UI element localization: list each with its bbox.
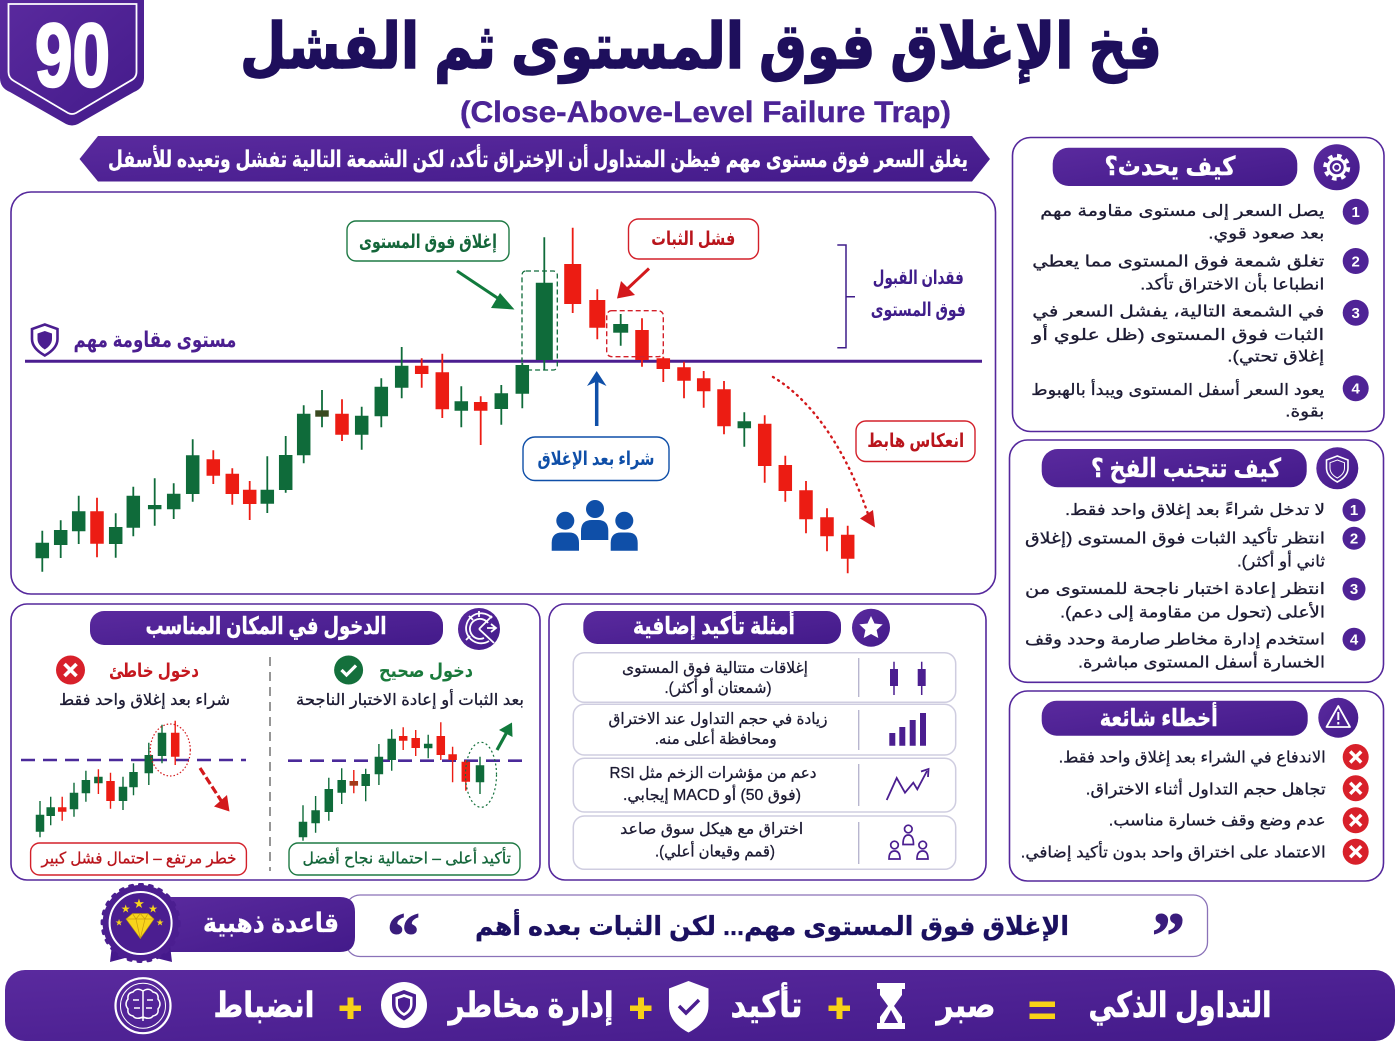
callout: bearish reversal: انعكاس هابط <box>867 431 964 452</box>
step numbers: 3 <box>1350 581 1358 598</box>
candlesticks <box>42 228 848 573</box>
row: momentum indicators <box>573 758 956 812</box>
icon: volume bars <box>889 713 926 746</box>
step numbers <box>1342 498 1366 651</box>
text: mistakes <box>1021 749 1326 863</box>
text: correct entry description: بعد الثبات أو إعادة الاختبار الناجحة <box>296 689 524 710</box>
golden rule label: قاعدة ذهبية <box>203 908 339 938</box>
label: wrong entry: دخول خاطئ <box>109 661 199 682</box>
icon: brain <box>116 978 170 1033</box>
icon: diamond seal: ★ <box>115 918 123 928</box>
icon: diamond seal: ★ <box>133 897 145 912</box>
arrow: green to breakout candle <box>457 271 514 310</box>
divider <box>269 657 271 871</box>
mini chart: early buy <box>21 721 246 837</box>
callout: buy after close: شراء بعد الإغلاق <box>538 449 654 470</box>
plus <box>630 998 652 1019</box>
icon: structure nodes <box>889 825 928 859</box>
text: avoidance steps: ثاني أو أكثر). <box>1237 551 1325 572</box>
row: consecutive closes <box>573 653 956 702</box>
row: consecutive closes: (شمعتان أو أكثر). <box>664 677 772 698</box>
formula: discipline: انضباط <box>214 986 314 1025</box>
text: steps: في الشمعة التالية، يفشل السعر في <box>1032 304 1324 322</box>
icon: two candles <box>890 662 925 695</box>
icon: target <box>458 608 500 650</box>
text: avoidance steps: الخسارة أسفل المستوى مباشرة. <box>1078 652 1325 673</box>
icon: diamond seal <box>102 884 179 962</box>
text: steps: انطباعا بأن الاختراق تأكد. <box>1140 272 1324 294</box>
step numbers: 2 <box>1350 530 1358 547</box>
icon: diamond seal: ★ <box>121 902 131 916</box>
text: steps: تغلق شمعة فوق المستوى مما يعطي <box>1032 254 1324 272</box>
icon: shield in circle <box>381 982 427 1028</box>
callout: close above level <box>347 221 509 261</box>
icon: crowd of traders <box>552 500 638 551</box>
icons: red crosses <box>1343 744 1369 865</box>
label: correct entry: دخول صحيح <box>379 661 473 682</box>
highlight: breakout candle <box>522 271 557 370</box>
arrow: blue buy arrow <box>587 371 606 426</box>
heading: how to avoid: كيف تتجنب الفخ ؟ <box>1091 453 1282 484</box>
icon: warning <box>1318 698 1358 738</box>
panel: common mistakes <box>1010 691 1384 881</box>
step numbers <box>1343 199 1369 401</box>
row: momentum indicators: (فوق 50) أو MACD إيجابي. <box>623 784 801 805</box>
arrow: green up <box>497 722 512 750</box>
row: market structure: اختراق مع هيكل سوق صاعد <box>620 821 803 839</box>
icon: gear <box>1314 144 1360 190</box>
step numbers: 4 <box>1352 381 1361 398</box>
text: avoidance steps: انتظر إعادة اختبار ناجحة للمستوى من <box>1025 581 1325 599</box>
golden rule label <box>102 884 355 962</box>
quote mark: right: ” <box>1152 900 1185 973</box>
text: avoidance steps: انتظر تأكيد الثبات فوق المستوى (إغلاق <box>1025 526 1325 548</box>
text: golden rule: الإغلاق فوق المستوى مهم... لكن الثبات بعده أهم <box>475 909 1069 942</box>
pill: high risk <box>31 843 246 875</box>
equals sign <box>1030 1002 1055 1019</box>
text: mistakes: الاعتماد على اختراق واحد بدون تأكيد إضافي. <box>1021 841 1326 863</box>
plus <box>340 998 361 1019</box>
step numbers: 2 <box>1352 253 1360 270</box>
pill: higher confirmation: تأكيد أعلى – احتمالية نجاح أفضل <box>302 846 511 868</box>
highlight: failure candles <box>607 311 663 357</box>
definition banner: يغلق السعر فوق مستوى مهم فيظن المتداول أن الإختراق تأكد، لكن الشمعة التالية تفشل وتعيده للأسفل <box>108 143 968 173</box>
wrong entry column <box>21 656 246 875</box>
mini chart: confirmed retest <box>288 722 529 841</box>
bracket: loss of acceptance <box>837 245 855 348</box>
icon: green check <box>334 656 363 684</box>
formula: risk management: إدارة مخاطر <box>447 986 614 1026</box>
row: volume increase: زيادة في حجم التداول عند الاختراق <box>608 711 828 729</box>
bottom formula bar <box>5 970 1395 1041</box>
panel: how it happens <box>1012 138 1384 432</box>
resistance level line <box>25 360 982 363</box>
icon: check shield <box>669 981 708 1032</box>
heading: common mistakes: أخطاء شائعة <box>1100 702 1218 732</box>
panel: additional confirmation examples <box>549 604 986 880</box>
heading: extra confirmation: أمثلة تأكيد إضافية <box>633 610 795 640</box>
text: steps: بقوة. <box>1285 404 1324 422</box>
row: volume increase: ومحافظة أعلى منه. <box>655 728 777 749</box>
row: market structure: (قمم وقيعان أعلي). <box>655 841 775 862</box>
text: steps <box>1031 203 1324 422</box>
label: loss of acceptance above level: فوق المستوى <box>871 300 966 321</box>
callout: failure to hold: فشل الثبات <box>651 229 735 250</box>
icon: star <box>852 609 890 647</box>
text: avoidance steps <box>1025 501 1325 673</box>
callout: bearish reversal <box>856 421 975 462</box>
text: mistakes: عدم وضع وقف خسارة مناسب. <box>1109 813 1326 831</box>
label: loss of acceptance above level: فقدان القبول <box>873 268 964 289</box>
text: steps: يعود السعر أسفل المستوى ويبدأ بالهبوط <box>1031 379 1324 400</box>
text: steps: بعد صعود قوي. <box>1208 225 1324 243</box>
subtitle: (Close-Above-Level Failure Trap) <box>460 96 951 129</box>
panel: candlestick chart <box>11 192 996 594</box>
step numbers: 3 <box>1352 305 1360 322</box>
heading: how it happens: كيف يحدث؟ <box>1104 151 1236 181</box>
icon: hourglass <box>877 983 905 1029</box>
arrow: red to failure candle <box>617 268 649 298</box>
text: steps: الثبات فوق المستوى (ظل علوي أو <box>1031 324 1324 345</box>
resistance level label: مستوى مقاومة مهم <box>74 327 236 353</box>
badge: number 90 <box>0 0 144 126</box>
resistance level label <box>32 324 236 356</box>
row: consecutive closes: إغلاقات متتالية فوق المستوى <box>622 660 808 677</box>
formula: patience: صبر <box>935 986 996 1026</box>
panel: entering at the right place <box>11 604 540 880</box>
heading: common mistakes <box>1042 701 1308 736</box>
quote mark: left: “ <box>387 900 420 973</box>
text: wrong entry description: شراء بعد إغلاق واحد فقط <box>59 692 230 710</box>
icon: trend line <box>887 769 928 800</box>
badge: number 90: 90 <box>35 6 110 106</box>
text: mistakes: الاندفاع في الشراء بعد إغلاق واحد فقط. <box>1059 749 1326 767</box>
icon: diamond seal: ★ <box>148 902 158 916</box>
text: avoidance steps: استخدم إدارة مخاطر صارمة وحدد وقف <box>1025 631 1325 649</box>
formula: smart trading: التداول الذكي <box>1088 986 1272 1026</box>
label: loss of acceptance above level <box>871 268 966 321</box>
text: steps: يصل السعر إلى مستوى مقاومة مهم <box>1040 203 1324 221</box>
correct entry column <box>288 656 529 875</box>
heading: extra confirmation <box>583 610 841 644</box>
callout: close above level: إغلاق فوق المستوى <box>359 232 497 253</box>
step numbers: 1 <box>1350 502 1358 519</box>
quote box: golden rule <box>346 895 1208 973</box>
row: market structure <box>573 816 956 869</box>
pill: high risk: خطر مرتفع – احتمال فشل كبير <box>41 850 236 868</box>
arrow: dotted bearish path <box>773 377 875 528</box>
text: avoidance steps: لا تدخل شراءً بعد إغلاق واحد فقط. <box>1065 501 1325 520</box>
callout: failure to hold <box>628 219 758 259</box>
heading: right entry <box>90 611 443 645</box>
row: volume increase <box>573 704 956 755</box>
text: steps: إغلاق تحتي). <box>1227 349 1324 367</box>
plus <box>828 998 850 1019</box>
title: فخ الإغلاق فوق المستوى ثم الفشل <box>240 12 1162 84</box>
pill: higher confirmation <box>289 843 520 875</box>
heading: how it happens <box>1053 148 1297 186</box>
icon: diamond seal: ★ <box>156 918 164 928</box>
panel: how to avoid the trap <box>1010 440 1384 682</box>
step numbers: 4 <box>1350 631 1359 648</box>
row: momentum indicators: دعم من مؤشرات الزخم مثل RSI <box>610 765 817 782</box>
definition banner <box>80 136 990 182</box>
text: mistakes: تجاهل حجم التداول أثناء الاختراق. <box>1086 778 1326 799</box>
text: avoidance steps: الأعلى (تحول من مقاومة إلى دعم). <box>1060 601 1325 622</box>
arrow: red down <box>200 768 230 812</box>
icon: shield <box>1316 447 1358 489</box>
heading: right entry: الدخول في المكان المناسب <box>146 613 386 640</box>
step numbers: 1 <box>1352 204 1360 221</box>
callout: buy after close <box>523 437 669 480</box>
icon: red cross <box>56 656 85 684</box>
heading: how to avoid <box>1042 449 1307 487</box>
formula: confirmation: تأكيد <box>730 982 802 1025</box>
